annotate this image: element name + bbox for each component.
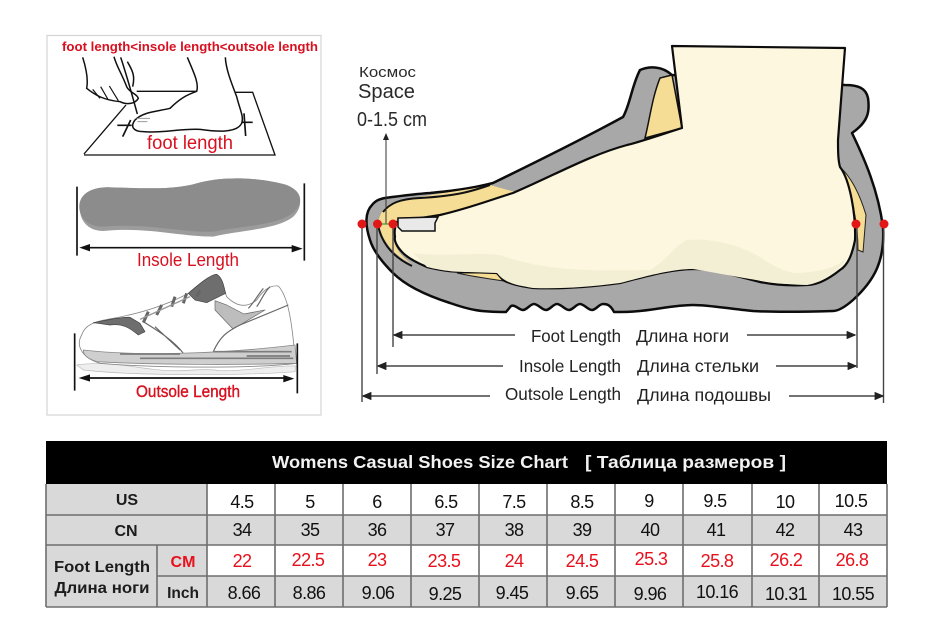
heading: length comparison: foot length<insole length<outsole length bbox=[62, 40, 318, 54]
row: foot length in cm: 25.3 bbox=[635, 549, 668, 569]
callout: space allowance: Космос bbox=[359, 64, 417, 81]
measurement guides bbox=[362, 224, 884, 403]
length labels: Длина подошвы bbox=[637, 385, 771, 405]
row: foot length in inches: 9.96 bbox=[634, 584, 667, 604]
diagram: foot inside shoe bbox=[366, 46, 883, 312]
row: US sizes: 6 bbox=[372, 492, 382, 512]
row: CN sizes: 40 bbox=[641, 520, 660, 540]
table grid bbox=[46, 484, 887, 607]
row: foot length in inches: 9.25 bbox=[429, 584, 462, 604]
row labels: US bbox=[116, 492, 138, 509]
row: US sizes: 8.5 bbox=[570, 492, 594, 512]
illustration: foot on paper bbox=[83, 57, 275, 155]
row: US sizes: 9.5 bbox=[703, 491, 727, 511]
row labels: CN bbox=[114, 523, 138, 540]
row: foot length in inches: 8.66 bbox=[228, 583, 261, 603]
label: foot length: foot length bbox=[147, 133, 233, 154]
row labels: CM bbox=[171, 554, 195, 571]
row labels: Длина ноги bbox=[54, 580, 150, 597]
row: CN sizes: 39 bbox=[573, 520, 592, 540]
callout: space allowance: Space bbox=[358, 81, 415, 103]
measurement points bbox=[358, 220, 888, 228]
callout: space allowance bbox=[357, 64, 427, 224]
row: foot length in cm: 23.5 bbox=[428, 551, 461, 571]
length labels bbox=[505, 326, 771, 405]
row: US sizes bbox=[230, 491, 868, 512]
row: foot length in cm: 23 bbox=[368, 550, 387, 570]
row: foot length in inches: 8.86 bbox=[293, 583, 326, 603]
length labels: Длина стельки bbox=[637, 356, 759, 376]
illustration: sneaker bbox=[77, 274, 297, 375]
label: outsole length: Outsole Length bbox=[136, 382, 240, 401]
row: foot length in cm: 26.2 bbox=[770, 550, 803, 570]
length labels: Foot Length bbox=[531, 326, 621, 346]
row: US sizes: 10 bbox=[776, 492, 795, 512]
row: foot length in cm: 22 bbox=[233, 551, 252, 571]
row: US sizes: 5 bbox=[305, 492, 315, 512]
row: foot length in inches: 10.55 bbox=[832, 584, 875, 604]
row: CN sizes: 41 bbox=[707, 520, 726, 540]
row labels: Inch bbox=[167, 585, 199, 602]
row: CN sizes: 38 bbox=[505, 520, 524, 540]
toe nail bbox=[398, 217, 438, 231]
space gap marker bbox=[377, 223, 393, 225]
foot bbox=[395, 46, 855, 288]
length labels: Длина ноги bbox=[636, 326, 729, 346]
length labels: Outsole Length bbox=[505, 384, 621, 404]
row: foot length in cm: 24.5 bbox=[566, 551, 599, 571]
inner shoe line bbox=[378, 185, 490, 266]
row: US sizes: 6.5 bbox=[434, 492, 458, 512]
panel: measuring guide bbox=[47, 36, 321, 415]
dimension: outsole arrow bbox=[75, 333, 297, 393]
row labels bbox=[54, 492, 199, 602]
row: foot length in inches bbox=[228, 582, 875, 604]
row: CN sizes: 34 bbox=[233, 520, 252, 540]
shoe sole and upper bbox=[366, 67, 883, 312]
row labels: Foot Length bbox=[54, 559, 150, 576]
row: CN sizes: 42 bbox=[776, 520, 795, 540]
callout: space allowance: 0-1.5 cm bbox=[357, 109, 427, 131]
arrow: space bbox=[385, 134, 387, 224]
row: foot length in cm: 24 bbox=[505, 551, 524, 571]
row: foot length in inches: 9.65 bbox=[566, 583, 599, 603]
row: foot length in inches: 10.16 bbox=[696, 582, 739, 602]
row: CN sizes: 37 bbox=[436, 520, 455, 540]
row: CN sizes bbox=[233, 520, 863, 540]
label: insole length: Insole Length bbox=[137, 250, 239, 270]
dimension: insole arrow bbox=[77, 183, 304, 261]
table header: Womens Casual Shoes Size Chart bbox=[272, 452, 568, 472]
row: foot length in inches: 10.31 bbox=[765, 584, 808, 604]
row: foot length in cm: 25.8 bbox=[701, 551, 734, 571]
row: foot length in cm: 22.5 bbox=[292, 550, 325, 570]
row: foot length in inches: 9.06 bbox=[362, 583, 395, 603]
table header: [ Таблица размеров ] bbox=[585, 452, 786, 472]
row: US sizes: 9 bbox=[644, 491, 654, 511]
row: CN sizes: 43 bbox=[844, 520, 863, 540]
row: US sizes: 10.5 bbox=[835, 491, 868, 511]
length labels: Insole Length bbox=[519, 356, 621, 376]
illustration: insole bbox=[79, 178, 300, 237]
size chart table bbox=[46, 441, 887, 607]
row: foot length in cm: 26.8 bbox=[836, 550, 869, 570]
row: CN sizes: 36 bbox=[368, 520, 387, 540]
row: foot length in inches: 9.45 bbox=[496, 583, 529, 603]
row: US sizes: 7.5 bbox=[502, 492, 526, 512]
row: foot length in cm bbox=[233, 549, 869, 571]
row: US sizes: 4.5 bbox=[230, 492, 254, 512]
table header bbox=[46, 441, 887, 484]
foot sole shading bbox=[413, 240, 847, 288]
row: CN sizes: 35 bbox=[301, 520, 320, 540]
yellow lining bbox=[379, 75, 866, 281]
